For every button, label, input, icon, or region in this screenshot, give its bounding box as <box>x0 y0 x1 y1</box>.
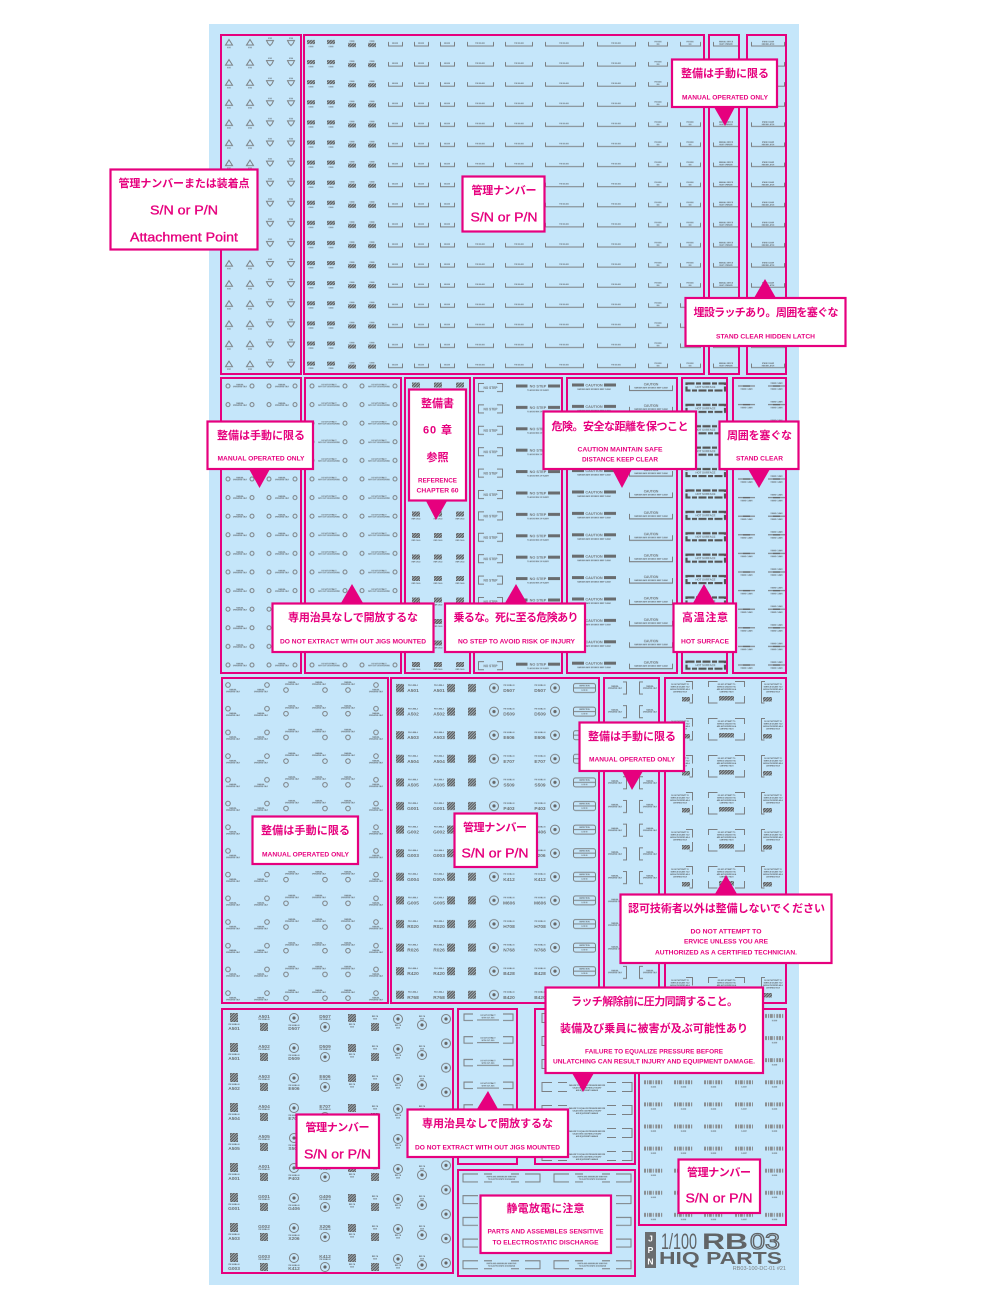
background decal sheet <box>209 24 799 1285</box>
callout: caution keep clear with arrow: CAUTION MAINTAIN SAFE <box>578 446 663 454</box>
callout: no step with arrow <box>445 584 585 652</box>
panel: manual operated brackets <box>604 678 659 1003</box>
part number labels lower left: D509 <box>288 1056 300 1062</box>
callout: serial number middle: S/N or P/N <box>462 846 528 860</box>
panel: reference chapter 60 marks <box>405 378 470 673</box>
callout: manual operated lower left: 整備は手動に限る <box>261 823 350 837</box>
part number labels lower left: A504 <box>258 1104 270 1110</box>
part number labels: P403 <box>503 806 515 812</box>
callout: serial number centre: 管理ナンバー <box>472 183 536 197</box>
callout: certified technician with arrow <box>620 875 832 963</box>
part number labels: M606 <box>534 900 546 906</box>
panel: stand clear marks <box>733 378 786 673</box>
callout: reference chapter 60 with arrow: 60 章 <box>423 422 452 436</box>
part number labels <box>407 688 546 1001</box>
part number labels lower left: A504 <box>228 1116 240 1122</box>
logo: JPN badge <box>645 1232 656 1268</box>
callout: serial number lower left <box>296 1114 379 1168</box>
part number labels lower left: G406 <box>319 1194 331 1200</box>
part number labels lower left: K412 <box>319 1254 331 1260</box>
callout: do not extract lower with arrow: DO NOT EXTRACT WITH OUT JIGS MOUNTED <box>415 1144 560 1152</box>
part number labels lower left: A001 <box>258 1164 270 1170</box>
callout: hidden latch with arrow <box>686 279 846 346</box>
panel: do not extract circles <box>305 378 401 673</box>
part number labels: H708 <box>534 924 546 930</box>
part number labels: A505 <box>407 782 419 788</box>
part number labels: N768 <box>534 948 546 954</box>
part number labels: K412 <box>503 877 515 883</box>
part number labels lower left: A505 <box>228 1146 240 1152</box>
callout: manual operated top right with arrow: 整備は手動に限る <box>681 66 769 80</box>
callout: do not extract with arrow: 専用治具なしで開放するな <box>288 610 418 624</box>
callout: caution keep clear with arrow: 危険。安全な距離を保つこと <box>552 419 688 433</box>
part number labels lower left: E707 <box>319 1104 331 1110</box>
part number labels: G005 <box>433 900 445 906</box>
callout: manual operated lower left: MANUAL OPERATED ONLY <box>262 852 350 858</box>
part number labels: D509 <box>503 712 515 718</box>
part number labels lower left: S509 <box>319 1134 331 1140</box>
callout: manual operated middle with arrow: MANUAL OPERATED ONLY <box>589 756 676 764</box>
part number labels: R420 <box>407 971 419 977</box>
callout: do not extract with arrow <box>272 584 434 652</box>
callout: manual operated middle with arrow: 整備は手動に限る <box>588 729 676 743</box>
callout: electrostatic discharge: 静電放電に注意 <box>506 1201 584 1215</box>
part number labels lower left: K412 <box>288 1266 300 1272</box>
callout: certified technician with arrow: 認可技術者以外は整備しないでください <box>628 901 825 915</box>
callout: serial number lower right <box>678 1160 760 1213</box>
part number labels: A502 <box>433 712 445 718</box>
part number labels lower left: G001 <box>228 1206 240 1212</box>
panel: caution marks <box>567 378 677 673</box>
panel: no step marks <box>474 378 562 673</box>
panel: electrostatic discharge brackets <box>458 1170 635 1276</box>
panel: attachment point marks <box>221 35 301 374</box>
callout: pressure warning with arrow: 装備及び乗員に被害が及ぶ可能性あり <box>560 1021 748 1035</box>
part number labels lower left: P403 <box>288 1176 300 1182</box>
callout: reference chapter 60 with arrow: CHAPTER 60 <box>416 488 459 494</box>
callout: electrostatic discharge: TO ELECTROSTATIC DISCHARGE <box>492 1240 599 1246</box>
logo: JPN badge: P <box>648 1245 654 1255</box>
callout: electrostatic discharge: PARTS AND ASSEMBLES SENSITIVE <box>488 1228 604 1236</box>
callout: manual operated middle with arrow <box>580 722 684 790</box>
callout: serial number lower right: S/N or P/N <box>686 1190 752 1206</box>
part number labels: B428 <box>503 971 515 977</box>
callout: manual operated top right with arrow: MANUAL OPERATED ONLY <box>682 94 769 102</box>
panel: manual operated circles <box>221 378 301 673</box>
logo: product code: RB03-100-DC-01 #21 <box>733 1266 786 1272</box>
callout: reference chapter 60 with arrow <box>409 390 466 520</box>
part number labels: K412 <box>534 877 546 883</box>
part number labels: A503 <box>407 735 419 741</box>
part number labels: A501 <box>407 688 419 694</box>
callout: manual operated left with arrow: 整備は手動に限る <box>217 428 305 442</box>
part number labels: B420 <box>503 995 515 1001</box>
panel: manual operated circle rows <box>222 678 388 1003</box>
part number labels: G001 <box>433 806 445 812</box>
part number labels lower left: D509 <box>319 1044 331 1050</box>
part number labels lower left: G003 <box>258 1254 270 1260</box>
callout: serial number lower right: 管理ナンバー <box>687 1165 751 1179</box>
callout: do not extract lower with arrow <box>408 1091 568 1157</box>
part number labels lower left: A502 <box>258 1044 270 1050</box>
part number labels: R768 <box>407 995 419 1001</box>
part number labels lower left: G003 <box>228 1266 240 1272</box>
part number labels: R026 <box>433 948 445 954</box>
part number labels: M606 <box>503 900 515 906</box>
callout: do not extract with arrow: DO NOT EXTRACT WITH OUT JIGS MOUNTED <box>280 638 426 646</box>
part number labels: G003 <box>433 853 445 859</box>
part number labels: E606 <box>534 735 546 741</box>
callout: no step with arrow: 乗るな。死に至る危険あり <box>454 610 578 624</box>
part number labels: G003 <box>407 853 419 859</box>
part number labels: A505 <box>433 782 445 788</box>
panel: barcode marks <box>639 1009 786 1225</box>
callout: hidden latch with arrow: 埋設ラッチあり。周囲を塞ぐな <box>694 305 838 319</box>
callout: pressure warning with arrow <box>546 988 763 1092</box>
callout: reference chapter 60 with arrow: 整備書 <box>421 396 454 410</box>
part number labels: A501 <box>433 688 445 694</box>
callout: serial number middle: 管理ナンバー <box>463 820 527 834</box>
part number labels: G00A <box>433 877 446 883</box>
part number labels: G004 <box>407 877 419 883</box>
callout: manual operated top right with arrow <box>672 60 777 126</box>
part number labels lower left: D507 <box>319 1014 331 1020</box>
panel: serial number brackets <box>304 35 704 374</box>
logo: HIQ PARTS: HIQ PARTS <box>659 1248 782 1268</box>
part number labels lower left: A501 <box>258 1014 270 1020</box>
part number labels: R420 <box>433 971 445 977</box>
part number labels lower left: A505 <box>258 1134 270 1140</box>
part number labels: D507 <box>534 688 546 694</box>
part number labels: E606 <box>503 735 515 741</box>
part number labels: R768 <box>433 995 445 1001</box>
part number labels lower left: A001 <box>228 1176 240 1182</box>
callout: reference chapter 60 with arrow: REFERENCE <box>418 478 458 484</box>
panel: do not extract brackets lower <box>458 1009 517 1164</box>
callout: stand clear with arrow <box>720 422 798 488</box>
callout: no step with arrow: NO STEP TO AVOID RISK OF INJURY <box>458 638 576 646</box>
part number labels lower left: A502 <box>228 1086 240 1092</box>
part number labels: G002 <box>407 830 419 836</box>
part number labels lower left <box>228 1014 331 1272</box>
callout: serial number middle <box>454 814 537 867</box>
callout: reference chapter 60 with arrow: 参照 <box>426 450 448 464</box>
part number labels: P403 <box>534 806 546 812</box>
part number labels lower left: S509 <box>288 1146 300 1152</box>
part number labels lower left: G001 <box>258 1194 270 1200</box>
part number labels: X206 <box>503 853 515 859</box>
part number labels: S509 <box>534 782 546 788</box>
logo: RB03 1/100 HIQ PARTS <box>645 1229 786 1272</box>
part number labels lower left: A503 <box>258 1074 270 1080</box>
part number labels lower left: A501 <box>228 1056 240 1062</box>
callout: serial number lower left: 管理ナンバー <box>306 1120 370 1134</box>
part number labels: E707 <box>534 759 546 765</box>
callout: caution keep clear with arrow <box>544 412 696 488</box>
part number labels: E707 <box>503 759 515 765</box>
callout: attachment point: 管理ナンバーまたは装着点 <box>118 176 250 190</box>
part number labels lower left: D507 <box>288 1026 300 1032</box>
callout: serial number centre: S/N or P/N <box>470 210 538 224</box>
callout: attachment point: Attachment Point <box>130 230 238 244</box>
part number labels: N768 <box>503 948 515 954</box>
logo: RB: RB <box>702 1229 748 1254</box>
callout: certified technician with arrow: AUTHORIZED AS A CERTIFIED TECHNICIAN. <box>655 950 797 956</box>
part number labels: S509 <box>503 782 515 788</box>
part number labels: G005 <box>407 900 419 906</box>
panel: part number marks lower left <box>222 1009 453 1273</box>
callout: pressure warning with arrow: UNLATCHING CAN RESULT INJURY AND EQUIPMENT DAMAGE. <box>553 1058 755 1066</box>
callout: stand clear with arrow: 周囲を塞ぐな <box>727 428 792 442</box>
part number labels: B420 <box>534 995 546 1001</box>
part number labels lower left: A501 <box>228 1026 240 1032</box>
logo: JPN badge: N <box>647 1256 654 1266</box>
logo: scale: 1/100 <box>661 1229 697 1254</box>
part number labels lower left: G406 <box>288 1206 300 1212</box>
callout: hidden latch with arrow: STAND CLEAR HIDDEN LATCH <box>716 334 815 340</box>
part number labels: A504 <box>433 759 445 765</box>
callout: attachment point: S/N or P/N <box>150 202 218 218</box>
callout: do not extract lower with arrow: 専用治具なしで開放するな <box>422 1116 553 1130</box>
part number labels: H708 <box>503 924 515 930</box>
callout: certified technician with arrow: ERVICE UNLESS YOU ARE <box>684 938 769 946</box>
part number labels: A502 <box>407 712 419 718</box>
panel: part number rows <box>391 678 599 1003</box>
callout: electrostatic discharge <box>480 1196 611 1253</box>
callout: hot surface with arrow: 高温注意 <box>682 610 728 624</box>
panel: manual operated labels top <box>709 35 739 374</box>
callout: manual operated left with arrow: MANUAL OPERATED ONLY <box>218 456 305 462</box>
part number labels lower left: P403 <box>319 1164 331 1170</box>
callout: pressure warning with arrow: FAILURE TO EQUALIZE PRESSURE BEFORE <box>585 1048 724 1056</box>
part number labels: B428 <box>534 971 546 977</box>
callout: caution keep clear with arrow: DISTANCE KEEP CLEAR <box>582 456 658 464</box>
callout: serial number lower left: S/N or P/N <box>304 1146 371 1162</box>
panel: certified technician marks <box>665 678 786 1003</box>
part number labels: R020 <box>433 924 445 930</box>
part number labels: A504 <box>407 759 419 765</box>
part number labels: R020 <box>407 924 419 930</box>
part number labels: R026 <box>407 948 419 954</box>
callout: hot surface with arrow <box>674 584 736 652</box>
logo: JPN badge: J <box>648 1234 653 1244</box>
panel: stand clear hidden latch labels <box>747 35 786 374</box>
callout: certified technician with arrow: DO NOT ATTEMPT TO <box>690 928 762 936</box>
part number labels lower left: X206 <box>288 1236 300 1242</box>
callout: manual operated left with arrow <box>208 422 313 488</box>
part number labels: G406 <box>503 830 515 836</box>
part number labels lower left: A503 <box>228 1236 240 1242</box>
part number labels lower left: E606 <box>288 1086 300 1092</box>
part number labels: G001 <box>407 806 419 812</box>
part number labels: A503 <box>433 735 445 741</box>
panel: pressure warning brackets <box>535 1009 635 1164</box>
part number labels: G406 <box>534 830 546 836</box>
callout: hot surface with arrow: HOT SURFACE <box>681 638 730 646</box>
part number labels: X206 <box>534 853 546 859</box>
part number labels lower left: E707 <box>288 1116 300 1122</box>
callout: pressure warning with arrow: ラッチ解除前に圧力同調すること。 <box>571 994 738 1008</box>
part number labels lower left: E606 <box>319 1074 331 1080</box>
callout: manual operated lower left <box>252 816 358 864</box>
panel: hot surface marks <box>682 378 727 673</box>
part number labels lower left: X206 <box>319 1224 331 1230</box>
part number labels: G002 <box>433 830 445 836</box>
callout: serial number centre <box>462 176 544 232</box>
part number labels lower left: G002 <box>258 1224 270 1230</box>
logo: 03 outlined: 03 <box>750 1229 780 1254</box>
part number labels: D509 <box>534 712 546 718</box>
callout: attachment point <box>110 170 258 250</box>
callout: stand clear with arrow: STAND CLEAR <box>736 456 783 462</box>
part number labels: D507 <box>503 688 515 694</box>
